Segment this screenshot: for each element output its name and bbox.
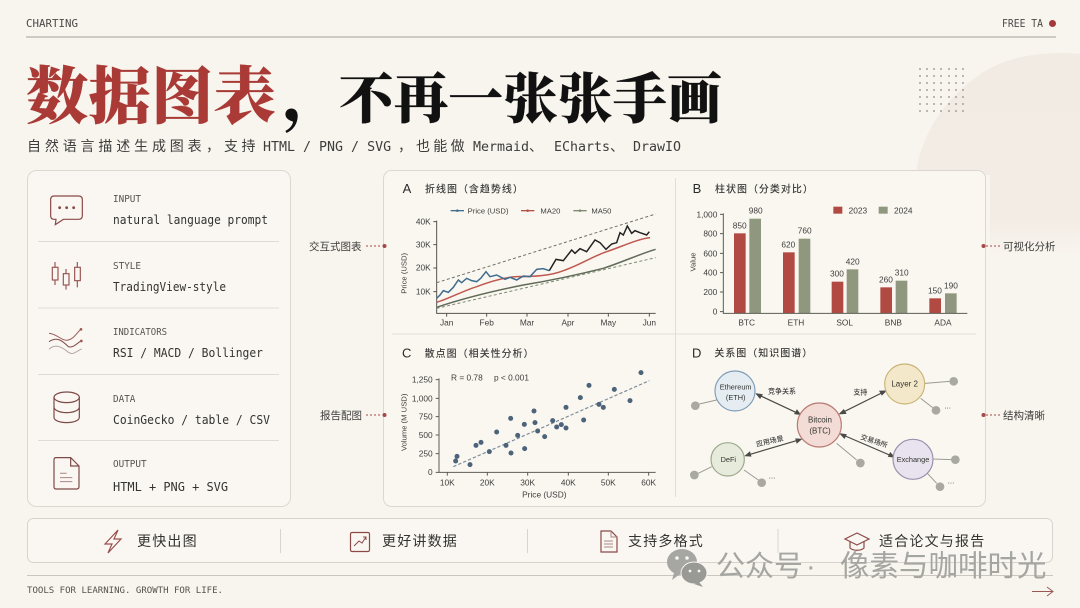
chart D: relationship graph: D <box>692 345 701 360</box>
chart B: bar chart: 420 <box>846 256 860 266</box>
chart B: bar chart: ADA <box>934 317 952 327</box>
chart A: line chart: 40K <box>416 216 431 226</box>
chart B: bar chart: 190 <box>944 280 958 290</box>
chart D: relationship graph: 支持 <box>853 387 867 396</box>
benefit: multi format <box>601 531 704 552</box>
chart A: line chart: MA50 <box>591 207 611 216</box>
chart B: bar chart: 800 <box>703 229 718 239</box>
chart C: scatter plot: 20K <box>480 477 495 487</box>
panel: chart gallery <box>384 170 986 506</box>
side label: clear structure: 结构清晰 <box>1003 409 1045 422</box>
watermark: 公众号 <box>716 551 803 583</box>
subtitle: ECharts <box>554 140 610 155</box>
item: style: TradingView-style <box>113 280 226 294</box>
chart D: relationship graph: 交易场所 <box>859 432 889 450</box>
benefit: multi format: 支持多格式 <box>628 533 704 549</box>
item: style: STYLE <box>113 261 141 272</box>
chart C: scatter plot: 散点图（相关性分析） <box>425 347 535 360</box>
icon: footer arrow <box>1032 587 1053 596</box>
footer tagline: TOOLS FOR LEARNING. GROWTH FOR LIFE. <box>27 586 223 596</box>
chart D: relationship graph: 应用场景 <box>755 434 784 449</box>
chart B: bar chart: 260 <box>879 275 893 285</box>
chart D: relationship graph: Layer 2 <box>891 380 919 389</box>
chart B: bar chart: B <box>693 181 701 196</box>
title <box>26 47 722 136</box>
chart A: line chart: 20K <box>416 263 431 273</box>
benefit: better storytelling <box>350 532 458 552</box>
chart C: scatter plot: 1,250 <box>412 375 433 385</box>
chart A: line chart: Price (USD) <box>399 252 408 294</box>
chart C: scatter plot <box>399 345 657 500</box>
chart D: relationship graph: Bitcoin <box>808 415 832 424</box>
chart C: scatter plot: 0 <box>428 467 433 477</box>
chart A: line chart <box>399 181 656 327</box>
subtitle: 自然语言描述生成图表 <box>27 138 206 154</box>
chart B: bar chart: 600 <box>703 248 718 258</box>
chart A: line chart: Feb <box>479 317 494 327</box>
subtitle: 、 <box>610 138 624 154</box>
item: output <box>54 458 228 494</box>
item: data: DATA <box>113 394 136 405</box>
title: ， <box>283 47 345 136</box>
chart C: scatter plot: R = 0.78 <box>451 372 483 382</box>
chart D: relationship graph: 竞争关系 <box>768 386 796 395</box>
side label: report figures: 报告配图 <box>320 409 362 422</box>
panel: benefits bar <box>28 518 1052 562</box>
chart C: scatter plot: 60K <box>641 477 657 487</box>
chart C: scatter plot: C <box>402 345 411 360</box>
chart B: bar chart: 柱状图（分类对比） <box>715 182 814 195</box>
chart D: relationship graph: ... <box>948 476 954 485</box>
chart B: bar chart: SOL <box>836 317 853 327</box>
title: 数据图表 <box>26 47 276 136</box>
chart A: line chart: A <box>403 181 412 196</box>
subtitle: DrawIO <box>633 140 681 155</box>
chart D: relationship graph: (BTC) <box>809 427 831 436</box>
side label: visual analysis: 可视化分析 <box>1003 240 1056 253</box>
chart C: scatter plot: 30K <box>520 477 536 487</box>
chart D: relationship graph <box>690 345 960 491</box>
chart B: bar chart: 980 <box>749 205 763 215</box>
chart B: bar chart: 850 <box>733 220 747 230</box>
item: input: INPUT <box>113 194 141 205</box>
chart C: scatter plot: 250 <box>419 449 433 459</box>
benefit: papers and reports: 适合论文与报告 <box>879 533 985 549</box>
chart A: line chart: 折线图（含趋势线） <box>425 182 524 195</box>
side label: interactive charts <box>309 240 386 253</box>
chart A: line chart: 30K <box>416 239 431 249</box>
chart B: bar chart: 2023 <box>849 205 868 215</box>
chart C: scatter plot: Price (USD) <box>522 490 567 500</box>
watermark: 像素与咖啡时光 <box>840 550 1047 583</box>
chart C: scatter plot: 50K <box>601 477 616 487</box>
chart A: line chart: Jan <box>440 317 454 327</box>
chart B: bar chart: 2024 <box>894 205 913 215</box>
watermark: · <box>806 551 816 583</box>
chart A: line chart: Mar <box>520 317 534 327</box>
subtitle: 支持 <box>224 138 259 154</box>
chart B: bar chart: 300 <box>830 269 844 279</box>
chart A: line chart: Apr <box>562 317 575 327</box>
chart B: bar chart: ETH <box>788 317 804 327</box>
side label: visual analysis <box>982 240 1056 253</box>
item: output: HTML + PNG + SVG <box>113 480 228 494</box>
chart C: scatter plot: 500 <box>419 430 433 440</box>
decorative dot matrix <box>919 68 964 112</box>
chart B: bar chart: 400 <box>703 268 718 278</box>
chart B: bar chart: 150 <box>928 285 942 295</box>
chart C: scatter plot: 1,000 <box>412 393 433 403</box>
subtitle: ， <box>398 138 412 154</box>
chart B: bar chart: 200 <box>703 287 718 297</box>
chart B: bar chart <box>689 181 967 327</box>
chart B: bar chart: 620 <box>781 239 796 249</box>
item: indicators <box>49 327 263 360</box>
header: free tag: FREE TA <box>1002 18 1044 30</box>
side label: interactive charts: 交互式图表 <box>309 240 362 253</box>
item: indicators: INDICATORS <box>113 327 167 338</box>
side label: clear structure <box>982 409 1045 422</box>
chart A: line chart: Jun <box>643 317 656 327</box>
chart A: line chart: MA20 <box>540 207 560 216</box>
chart B: bar chart: Value <box>689 252 698 272</box>
subtitle <box>27 138 681 155</box>
title: 不再一张张手画 <box>339 55 722 134</box>
chart A: line chart: 10K <box>416 286 431 296</box>
benefit: better storytelling: 更好讲数据 <box>382 533 458 549</box>
item: input <box>51 194 268 227</box>
benefit: faster <box>105 530 198 553</box>
subtitle: Mermaid <box>473 140 529 155</box>
chart B: bar chart: BTC <box>738 317 755 327</box>
chart C: scatter plot: p < 0.001 <box>494 372 529 382</box>
item: data <box>54 392 270 427</box>
chart D: relationship graph: ... <box>944 401 951 410</box>
chart D: relationship graph: Exchange <box>897 455 929 464</box>
chart B: bar chart: 310 <box>895 268 909 278</box>
chart B: bar chart: 1,000 <box>696 209 718 219</box>
item: input: natural language prompt <box>113 213 268 227</box>
item: data: CoinGecko / table / CSV <box>113 413 270 427</box>
chart D: relationship graph: DeFi <box>721 455 736 464</box>
watermark <box>667 549 1047 587</box>
side label: report figures <box>320 409 386 422</box>
chart B: bar chart: 760 <box>798 226 812 236</box>
benefit: faster: 更快出图 <box>137 533 198 549</box>
item: style <box>52 261 226 294</box>
chart D: relationship graph: (ETH) <box>726 393 745 402</box>
header: category label: CHARTING <box>26 18 78 30</box>
item: output: OUTPUT <box>113 459 147 470</box>
chart C: scatter plot: 10K <box>440 477 455 487</box>
panel: workflow list <box>28 170 290 506</box>
item: indicators: RSI / MACD / Bollinger <box>113 346 263 360</box>
chart B: bar chart: BNB <box>885 317 902 327</box>
chart A: line chart: May <box>600 317 617 327</box>
chart D: relationship graph: 关系图（知识图谱） <box>714 347 813 360</box>
chart D: relationship graph: Ethereum <box>720 382 752 391</box>
chart C: scatter plot: 750 <box>419 412 433 422</box>
chart C: scatter plot: Volume (M USD) <box>399 393 408 451</box>
chart D: relationship graph: ... <box>769 471 775 480</box>
subtitle: 、 <box>529 138 543 154</box>
subtitle: ， <box>206 138 220 154</box>
chart C: scatter plot: 40K <box>561 477 576 487</box>
chart A: line chart: Price (USD) <box>468 207 509 216</box>
subtitle: HTML / PNG / SVG <box>263 140 391 155</box>
chart B: bar chart: 0 <box>713 307 718 317</box>
subtitle: 也能做 <box>416 138 468 154</box>
